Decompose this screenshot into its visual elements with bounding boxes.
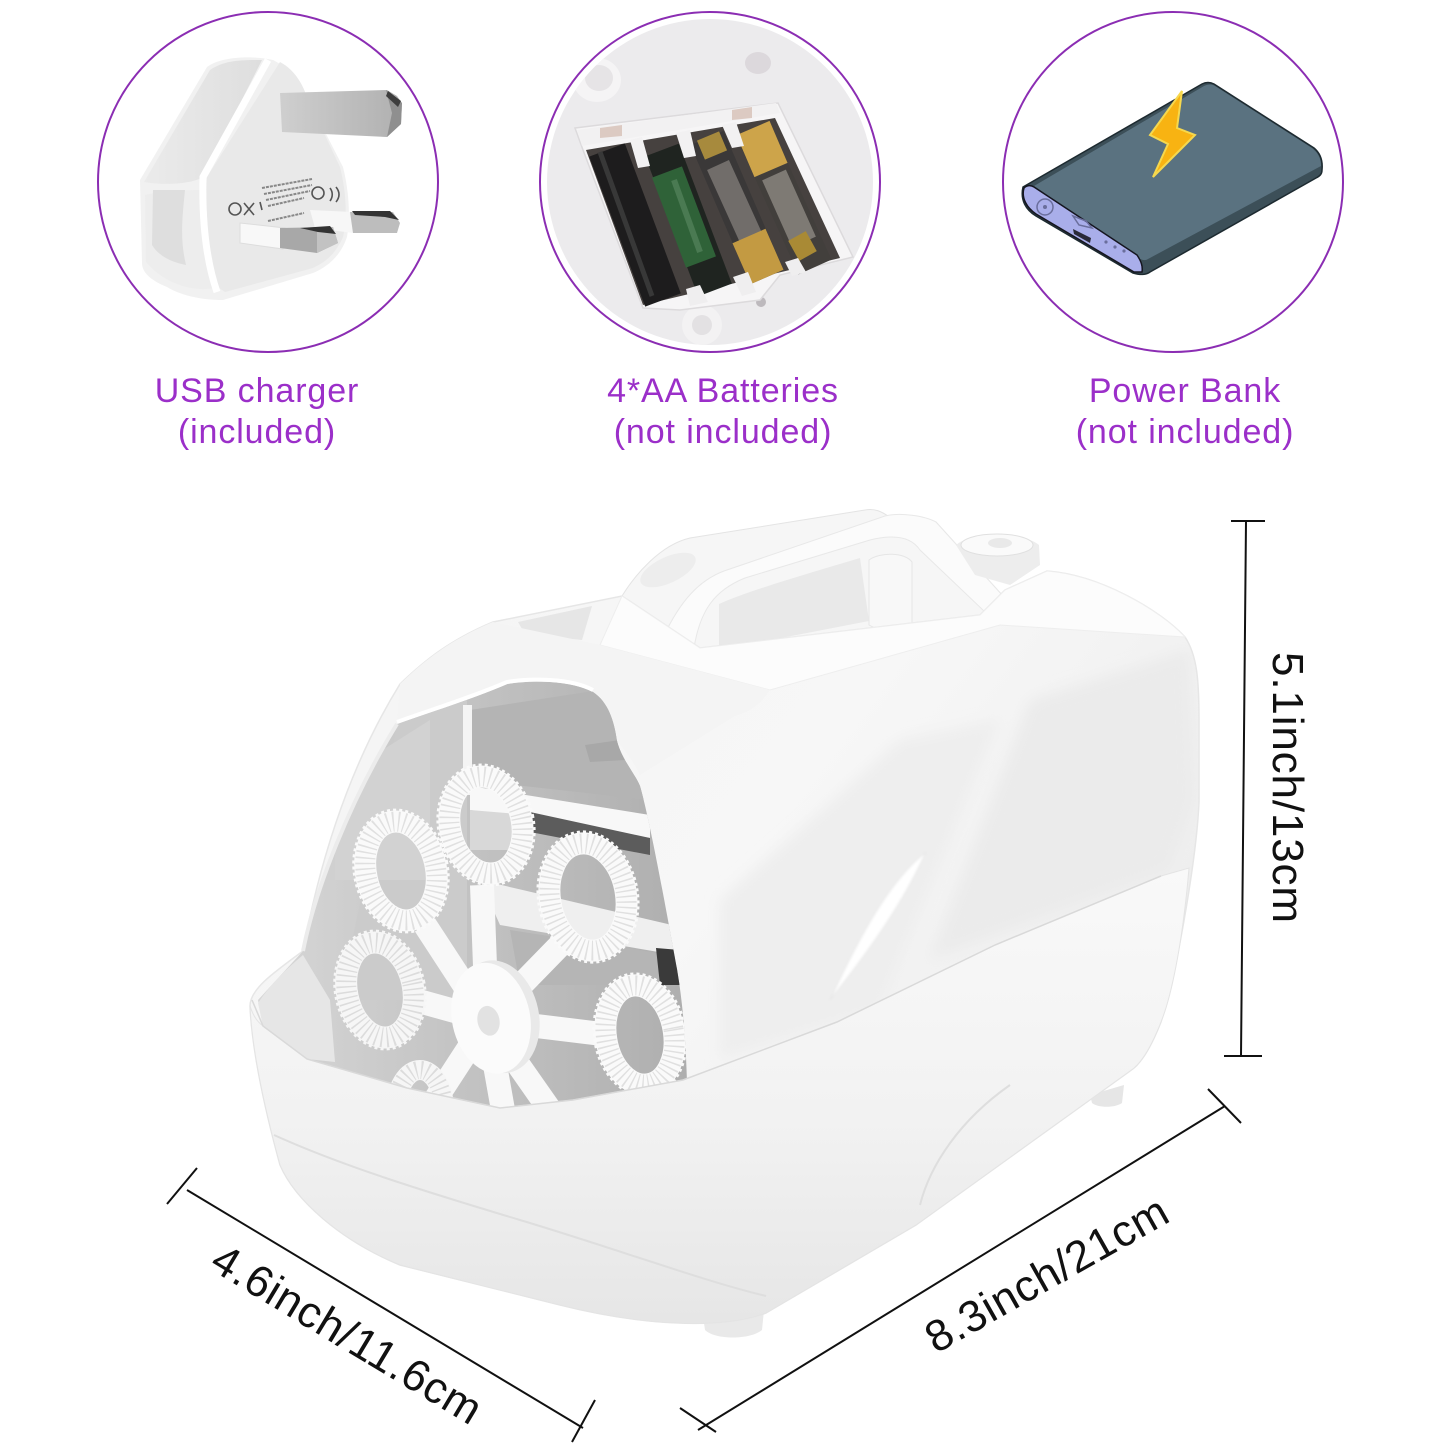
battery 3 — [707, 138, 767, 277]
battery 2 — [662, 150, 715, 290]
panel: USB charger — [98, 12, 438, 451]
wheel spokes — [415, 885, 610, 1110]
tray front — [250, 868, 1189, 1323]
back wall — [470, 690, 650, 800]
dimension: length — [680, 1089, 1241, 1432]
icon: battery compartment — [540, 10, 880, 355]
circle outline — [540, 12, 880, 352]
panel: power bank — [1003, 12, 1343, 451]
label: 4*AA Batteries: 4*AA Batteries — [607, 372, 839, 410]
top surface — [600, 571, 1185, 690]
rail upper — [470, 786, 650, 838]
left wall panels — [463, 700, 467, 966]
label: not included: (not included) — [1076, 413, 1294, 451]
battery 4 — [798, 260, 830, 274]
circle outline — [98, 12, 438, 352]
circle outline — [1003, 12, 1343, 352]
rail lower — [480, 880, 676, 955]
dark slot — [530, 812, 650, 855]
icon: lightning bolt — [1150, 91, 1195, 177]
hood inner lip — [397, 680, 593, 722]
length label: 8.3inch/21cm — [917, 1186, 1178, 1363]
handle — [622, 509, 1003, 650]
dial — [956, 534, 1040, 585]
label: not included: (not included) — [614, 413, 832, 451]
icon: power bank — [1022, 82, 1322, 274]
panel: AA batteries — [540, 10, 880, 451]
shading on side panel — [730, 699, 1070, 942]
vertical post — [463, 705, 472, 795]
foot: rear — [1090, 1085, 1124, 1107]
foot: front — [702, 1300, 765, 1338]
width label: 4.6inch/11.6cm — [203, 1235, 491, 1435]
base step line — [274, 1085, 1010, 1296]
label: Power Bank: Power Bank — [1089, 372, 1281, 410]
icon: plug marking glyphs — [229, 179, 339, 221]
tray rim — [252, 876, 1161, 1108]
icon: USB wall plug — [140, 57, 402, 300]
label: included: (included) — [178, 413, 336, 451]
hood side edge — [303, 724, 397, 951]
label: USB charger: USB charger — [155, 372, 359, 410]
tray inner left — [258, 955, 335, 1062]
battery 1 — [607, 150, 663, 300]
bubble ring: top — [436, 764, 536, 886]
height label: 5.1inch/13cm — [1263, 652, 1312, 924]
interior opening — [258, 682, 687, 1106]
dimension: width — [167, 1168, 595, 1442]
bubble ring: left — [333, 930, 426, 1050]
bubble ring: right — [593, 972, 686, 1090]
machine body — [250, 571, 1199, 1323]
bubble ring: bottom — [392, 1060, 453, 1097]
dimension: height — [1224, 521, 1312, 1056]
bubble ring: upper left — [352, 808, 450, 934]
compartment tabs — [577, 103, 780, 168]
side highlight streak — [830, 852, 926, 1000]
hood top panel — [397, 622, 770, 775]
wheel hub — [452, 960, 540, 1073]
bubble ring: upper right — [536, 830, 640, 964]
bubble machine — [250, 509, 1199, 1338]
